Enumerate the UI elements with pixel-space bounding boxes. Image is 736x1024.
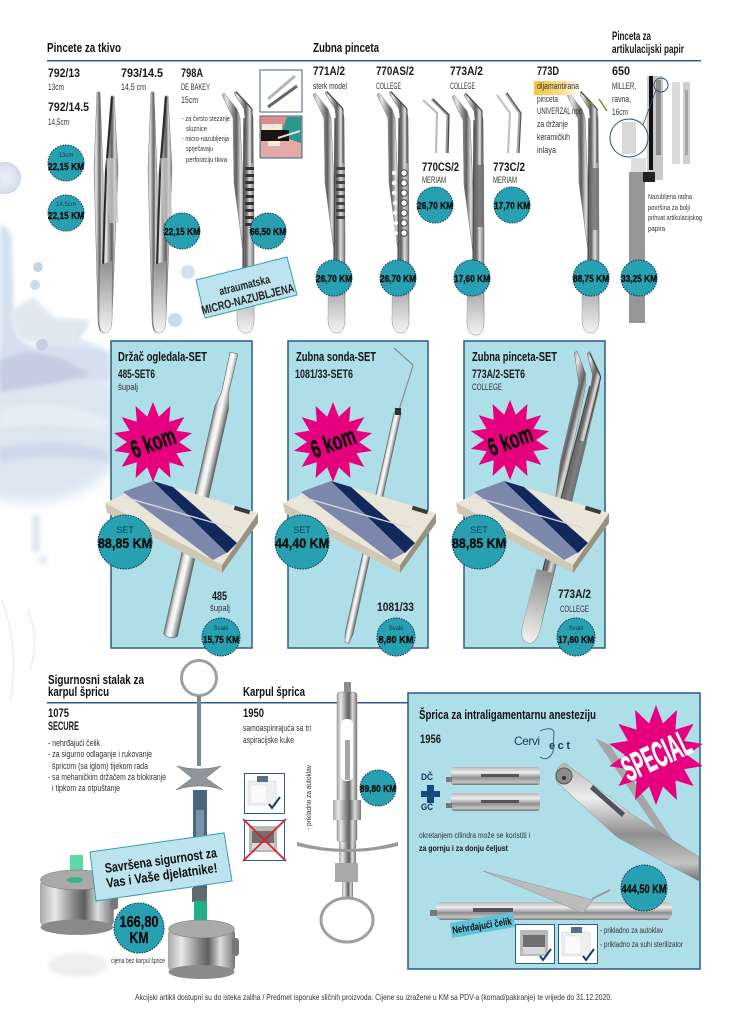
price badge 798A: 66,50 KM — [250, 226, 286, 238]
callout: atraumatska micro-nazubljena: atraumatska — [218, 274, 272, 298]
price badge 773D — [573, 260, 609, 296]
badge set price: SET — [293, 525, 311, 535]
badge set price — [275, 515, 329, 569]
labels: 770CS: MERIAM — [422, 175, 446, 185]
labels: 650: 650 — [612, 64, 630, 78]
tweezers 798A — [222, 91, 254, 333]
heading: Pincete za tkivo: Pincete za tkivo — [47, 40, 121, 55]
dental probe — [343, 348, 413, 644]
labels: 792: 792/13 — [48, 66, 80, 80]
price badge 13cm — [48, 145, 84, 181]
vertical note: prikladno za autoklav: - prikladno za autoklav — [304, 765, 313, 830]
title: Držač ogledala-SET — [118, 349, 207, 364]
labels: 773C: 773C/2 — [493, 160, 525, 174]
badge each price: 17,60 KM — [558, 635, 594, 646]
panel: Šprica za intraligamentarnu anesteziju — [408, 693, 703, 969]
price badge 770CS: 26,70 KM — [417, 200, 453, 212]
inset photo: tweezer tips — [260, 70, 302, 112]
code: 1956 — [420, 732, 441, 746]
product 1075 text: SECURE — [48, 719, 79, 733]
note: nazubljena radna povrsina: površina za bolji — [648, 203, 690, 212]
icon: plus — [421, 785, 440, 803]
badge each price — [202, 618, 240, 656]
labels: 773A: COLLEGE — [450, 81, 475, 91]
secure base right — [168, 920, 239, 979]
label GČ: GČ — [421, 801, 433, 812]
labels: 770AS: COLLEGE — [376, 81, 401, 91]
text: okretanjem: za gornju i za donju čeljust — [419, 844, 508, 853]
mirror handle — [163, 352, 241, 639]
logo CerviJect: ect — [549, 740, 570, 752]
tweezers 771A/2 — [313, 91, 345, 333]
product 1950 text: 1950 — [243, 706, 264, 720]
label 773A/2 college: COLLEGE — [560, 604, 589, 614]
set box — [283, 481, 436, 573]
product 1950 text: samoaspirirajuća sa tri — [243, 723, 311, 733]
code: 485-SET6 — [118, 367, 155, 381]
star 6 kom — [114, 402, 192, 482]
heading: Sigurnosni stalak za karpul špricu — [48, 672, 145, 699]
callout: savrsena sigurnost: Savršena sigurnost za — [104, 845, 218, 876]
price badge 773C — [494, 187, 530, 223]
title: Šprica za intraligamentarnu anesteziju — [419, 707, 596, 722]
logo CerviJect: Cervi — [514, 734, 541, 748]
badge set price — [452, 515, 506, 569]
tweezers 792 — [94, 92, 119, 333]
labels: 798A: - micro-nazubljenja — [182, 134, 230, 143]
labels: 770CS: 770CS/2 — [422, 160, 459, 174]
labels: 770AS: 770AS/2 — [376, 64, 414, 78]
price badge 166,80 KM — [114, 903, 164, 953]
labels: 771A: 771A/2 — [313, 64, 345, 78]
panel: Držač ogledala-SET — [98, 341, 258, 656]
badge each price: 8,80 KM — [378, 635, 414, 646]
price badge 650 — [621, 260, 657, 296]
label: Nehrđajući čelik: Nehrđajući čelik — [452, 916, 513, 937]
product 1075 text: - za sigurno odlaganje i rukovanje — [48, 749, 152, 759]
price badge 771A — [316, 260, 352, 296]
product 1075 text — [48, 706, 166, 793]
heading: Pinceta za artikulacijski papir: Pinceta za — [612, 29, 651, 43]
price badge 14,5cm — [48, 195, 84, 231]
bottom syringe — [430, 871, 672, 920]
price badge 166,80 KM: KM — [130, 930, 148, 947]
price badge 14,5cm: 22,15 KM — [48, 210, 84, 222]
label 773A/2 college — [558, 587, 591, 614]
big syringe — [556, 738, 699, 881]
labels: 773D: 773D — [537, 64, 559, 78]
star SPECIAL — [609, 705, 703, 805]
tweezers 770AS/2 — [377, 91, 409, 333]
label 485: 485 — [212, 589, 227, 603]
badge set price — [98, 515, 152, 569]
product 1075 text: špricom (sa iglom) tijekom rada — [52, 761, 148, 771]
panel: Zubna sonda-SET — [275, 341, 436, 656]
callout: savrsena sigurnost: Vas i Vaše djelatnike! — [105, 860, 218, 891]
panel: Zubna pinceta-SET — [452, 341, 609, 656]
labels: 773D: dijamantirana — [537, 81, 579, 91]
note: nazubljena radna povrsina: prihvat artikulacijskog — [648, 213, 702, 222]
labels: 650 — [612, 64, 636, 117]
labels: 798A: DE BAKEY — [181, 82, 210, 92]
labels: 798A: 798A — [181, 66, 203, 80]
badge each price — [377, 618, 415, 656]
badge each price: Svaki — [389, 626, 403, 632]
tweezers 773D — [567, 91, 607, 333]
label 773A/2 college: 773A/2 — [558, 587, 591, 601]
labels: 773D: za držanje — [537, 119, 568, 129]
title: Zubna pinceta-SET — [472, 349, 557, 364]
heading: Pinceta za artikulacijski papir — [612, 29, 684, 56]
note: cijena bez karpul šprice: cijena bez karpul šprice — [111, 956, 165, 965]
badge set price: SET — [470, 525, 488, 535]
product 1950 text — [243, 706, 311, 745]
carpule syringe in stand — [176, 660, 223, 929]
tweezers — [504, 348, 608, 645]
labels: 792: 13cm — [48, 82, 64, 92]
labels: 798A: sluznice — [186, 124, 207, 133]
price badge 773A: 17,60 KM — [454, 273, 490, 285]
labels: 798A: 15cm — [181, 95, 198, 105]
product 1950 text: aspiracijske kuke — [243, 735, 294, 745]
text: okretanjem — [419, 831, 530, 853]
price badge 13cm: 22,15 KM — [48, 161, 84, 173]
product 1075 text: - nehrđajući čelik — [48, 738, 100, 748]
heading: Sigurnosni stalak za karpul špricu: Sigurnosni stalak za — [48, 672, 145, 687]
labels: 798A: - za čvrsto stezanje — [182, 114, 230, 123]
note: nazubljena radna povrsina — [648, 192, 702, 233]
variant: COLLEGE — [472, 382, 502, 392]
price badge 13cm: 13cm — [59, 153, 73, 159]
price badge 773C: 17,70 KM — [494, 200, 530, 212]
syringe upper — [446, 767, 540, 785]
title: Zubna sonda-SET — [296, 349, 376, 364]
heading: Pinceta za artikulacijski papir: artikulacijski papir — [612, 42, 684, 56]
text: prikladno: - prikladno za suhi sterilizator — [600, 940, 683, 949]
badge each price: 15,75 KM — [203, 635, 239, 646]
price badge 166,80 KM: 166,80 — [120, 914, 159, 931]
badge set price: 88,85 KM — [98, 535, 152, 551]
labels: 798A — [181, 66, 230, 164]
icon: autoclave ok — [244, 774, 284, 814]
product 1075 text: 1075 — [48, 706, 69, 720]
label 485: šupalj — [210, 603, 230, 613]
callout: atraumatska micro-nazubljena — [196, 257, 297, 318]
heading: Sigurnosni stalak za karpul špricu: karpul špricu — [48, 684, 109, 699]
star 6 kom: 6 kom — [127, 422, 180, 464]
icon: washer not allowed — [243, 819, 286, 861]
syringe lower — [446, 793, 540, 811]
tweezers 793 — [148, 92, 173, 333]
callout: savrsena sigurnost — [90, 833, 232, 901]
star 6 kom — [294, 402, 372, 482]
header rule: top — [47, 60, 701, 62]
labels: 793: 14,5 cm — [121, 82, 146, 92]
labels: 771A — [313, 64, 347, 91]
label 485 — [210, 589, 230, 613]
labels: 650: ravna, — [612, 94, 631, 104]
product 1075 text: i tipkom za otpuštanje — [52, 783, 120, 793]
badge each price: Svaki — [214, 626, 228, 632]
heading: Karpul šprica: Karpul šprica — [243, 684, 306, 699]
callout: atraumatska micro-nazubljena: MICRO-NAZUBLJENA — [200, 281, 296, 317]
labels: 773D: UNIVERZAL npr. — [537, 106, 582, 116]
labels: 773A — [450, 64, 483, 91]
code: 773A/2-SET6 — [472, 367, 525, 381]
labels: 650: 16cm — [612, 107, 628, 117]
badge set price: 44,40 KM — [275, 535, 329, 551]
badge each price: Svaki — [569, 626, 583, 632]
text: prikladno: - prikladno za autoklav — [600, 926, 663, 935]
heading: Zubna pinceta: Zubna pinceta — [313, 40, 380, 55]
star 6 kom: 6 kom — [484, 420, 537, 462]
variant: šupalj — [118, 382, 138, 392]
secure base left — [40, 855, 118, 977]
price badge 14,5cm: 14,5cm — [56, 202, 76, 208]
background water splash — [0, 162, 195, 700]
label 1081/33: 1081/33 — [377, 600, 414, 614]
price badge 771A: 26,70 KM — [316, 273, 352, 285]
badge set price: SET — [116, 525, 134, 535]
tweezers 773A/2 — [452, 93, 484, 335]
labels: 773D: inlaya — [537, 145, 556, 155]
price badge 444,50 KM: 444,50 KM — [622, 882, 666, 896]
labels: 773C — [493, 160, 525, 185]
label DČ: DČ — [421, 771, 433, 782]
star 6 kom — [471, 400, 549, 480]
labels: 771A: sterk model — [313, 81, 347, 91]
inset photo: dental — [260, 116, 302, 158]
labels: 773C: MERIAM — [493, 175, 517, 185]
lower rule — [47, 702, 408, 704]
text: prikladno — [600, 926, 683, 949]
set box — [105, 481, 258, 573]
labels: 773A: 773A/2 — [450, 64, 483, 78]
price badge 793 — [164, 213, 200, 249]
star 6 kom: 6 kom — [307, 422, 360, 464]
labels: 770CS — [422, 160, 459, 185]
labels: 770AS — [376, 64, 414, 91]
labels: 792 — [48, 66, 89, 127]
price badge 1950: 89,80 KM — [360, 783, 396, 795]
price badge 770AS: 26,70 KM — [380, 273, 416, 285]
price badge 773A — [454, 260, 490, 296]
tweezer tips 770CS/2 — [423, 99, 449, 153]
labels: 792: 14,5cm — [48, 117, 69, 127]
price badge 793: 22,15 KM — [164, 226, 200, 238]
note: nazubljena radna povrsina: Nazubljena radna — [648, 192, 693, 201]
price badge 1950 — [360, 770, 396, 806]
articulating forceps 650 — [610, 76, 690, 323]
price badge 444,50 KM — [621, 865, 667, 911]
code: 1081/33-SET6 — [295, 367, 353, 381]
labels: 773D: pinceta — [537, 94, 558, 104]
price badge 798A — [250, 213, 286, 249]
icon: autoclave ok — [558, 924, 598, 964]
badge each price — [557, 618, 595, 656]
text: okretanjem: okretanjem cilindra može se koristiti i — [419, 831, 530, 840]
labels: 793: 793/14.5 — [121, 66, 163, 80]
labels: 793 — [121, 66, 163, 92]
note: nazubljena radna povrsina: papira — [648, 224, 666, 233]
labels: 773D — [534, 64, 582, 155]
set box — [456, 481, 609, 573]
karpul syringe 1950 — [297, 682, 398, 942]
labels: 798A: perforaciju tkiva — [186, 155, 228, 164]
labels: 798A: sprječavaju — [186, 144, 213, 153]
logo CerviJect — [514, 729, 570, 759]
price badge 773D: 88,75 KM — [573, 273, 609, 285]
footer note: Akcijski artikli dostupni su do isteka zaliha / Predmet isporuke sličnih proizvoda. Cijene su izražene u KM sa PDV-a (komad/pakiranje) te vrijede do 31.12.2020. — [135, 992, 612, 1002]
tweezer tips 773C/2 — [497, 93, 521, 153]
icon: washer ok — [516, 924, 554, 964]
labels: 650: MILLER, — [612, 81, 636, 91]
badge set price: 88,85 KM — [452, 535, 506, 551]
price badge 770AS — [380, 260, 416, 296]
product 1075 text: - sa mehaničkim držačem za blokiranje — [48, 772, 166, 782]
labels: 792: 792/14.5 — [48, 100, 89, 114]
price badge 770CS — [417, 187, 453, 223]
labels: 773D: keramičkih — [537, 132, 570, 142]
price badge 650: 33,25 KM — [621, 273, 657, 285]
